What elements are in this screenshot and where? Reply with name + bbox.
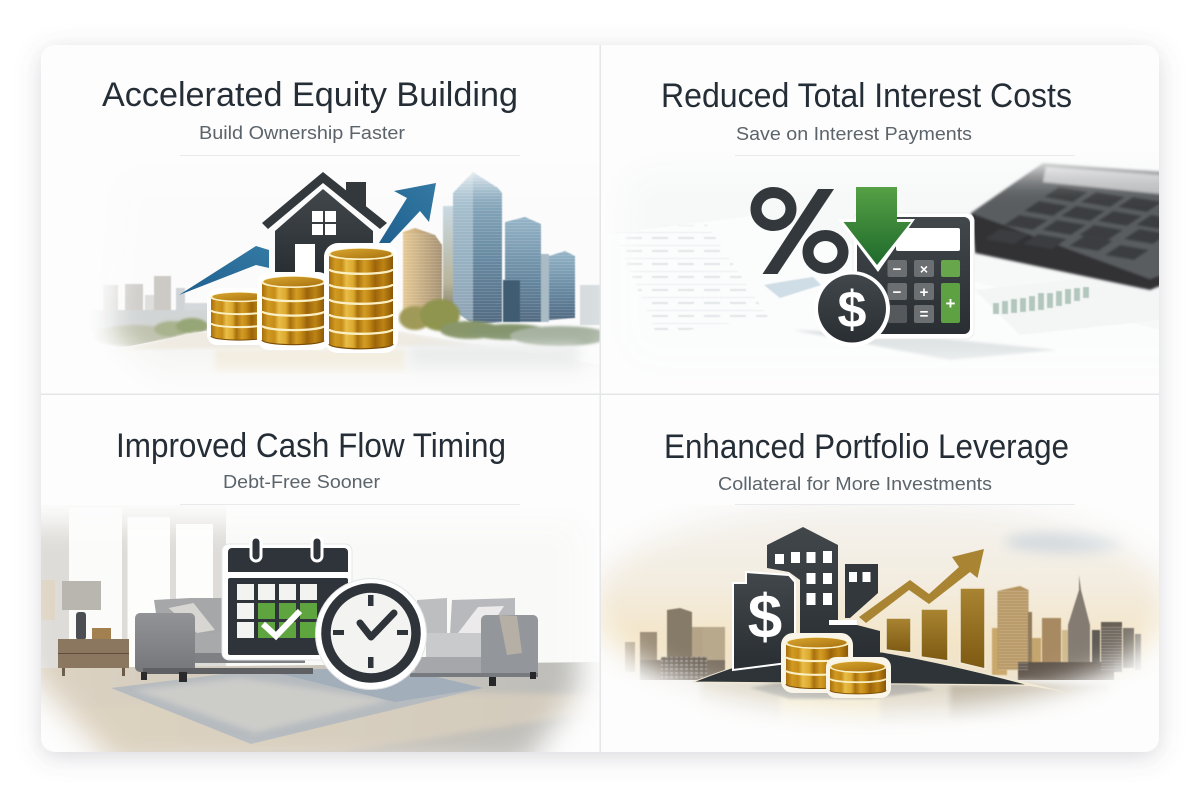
icon: calculator: − bbox=[893, 261, 902, 278]
icon: calculator: = bbox=[920, 306, 929, 323]
floor bbox=[126, 331, 207, 347]
trees bbox=[93, 299, 610, 347]
right sofa bbox=[410, 598, 538, 686]
icon: portfolio buildings: $ bbox=[748, 583, 782, 652]
side table and lamp bbox=[58, 581, 129, 676]
reflective floor bbox=[640, 680, 1114, 688]
icon: calculator: × bbox=[920, 261, 928, 277]
scene: living room bbox=[41, 500, 600, 752]
floor bbox=[41, 662, 600, 752]
desk calculator bbox=[971, 163, 1180, 290]
icon: gold bar chart with trend arrow bbox=[859, 549, 985, 669]
heading: reduced total interest costs: Reduced Total Interest Costs bbox=[661, 77, 1072, 115]
scene: city skyline and trees bbox=[99, 172, 600, 373]
icon: calculator bbox=[853, 213, 974, 339]
icon: calculator: + bbox=[920, 284, 929, 301]
rug bbox=[111, 668, 483, 744]
icon: clock bbox=[316, 578, 426, 690]
scene: papers and desk calculator bbox=[626, 162, 1159, 360]
icon: calculator: − bbox=[893, 284, 902, 301]
heading: accelerated equity building: Accelerated Equity Building bbox=[102, 76, 518, 114]
subheading: build ownership faster: Build Ownership Faster bbox=[199, 123, 405, 143]
left sofa bbox=[135, 598, 313, 682]
icon: dollar coin: $ bbox=[838, 281, 867, 339]
icon: rising blue arrow bbox=[179, 183, 436, 295]
heading: improved cash flow timing: Improved Cash Flow Timing bbox=[116, 427, 506, 465]
panel: enhanced portfolio leverage bbox=[601, 433, 1159, 723]
icon: ground arc bbox=[891, 674, 1074, 694]
panel: reduced total interest costs bbox=[626, 82, 1159, 360]
icon: calendar bbox=[222, 537, 352, 660]
icon: portfolio buildings bbox=[733, 527, 880, 670]
icon: green down arrow bbox=[838, 187, 915, 272]
icon: middle coin stack bbox=[257, 272, 330, 350]
panel: improved cash flow timing bbox=[41, 427, 600, 752]
icon: house bbox=[262, 172, 387, 276]
icon: coin stacks bbox=[781, 633, 891, 698]
icon: percent sign bbox=[756, 189, 843, 274]
panel: accelerated equity building bbox=[99, 81, 600, 373]
subheading: collateral for more investments: Collateral for More Investments bbox=[718, 474, 992, 494]
icon: calculator: + bbox=[946, 294, 956, 313]
icon: dollar coin bbox=[814, 271, 890, 347]
heading: enhanced portfolio leverage: Enhanced Portfolio Leverage bbox=[664, 428, 1069, 466]
icon: right coin stack bbox=[324, 243, 398, 353]
scene: golden skyline bbox=[601, 505, 1159, 723]
subheading: debt-free sooner: Debt-Free Sooner bbox=[223, 472, 380, 492]
subheading: save on interest payments: Save on Interest Payments bbox=[736, 124, 972, 144]
icon: left coin stack bbox=[207, 292, 259, 345]
